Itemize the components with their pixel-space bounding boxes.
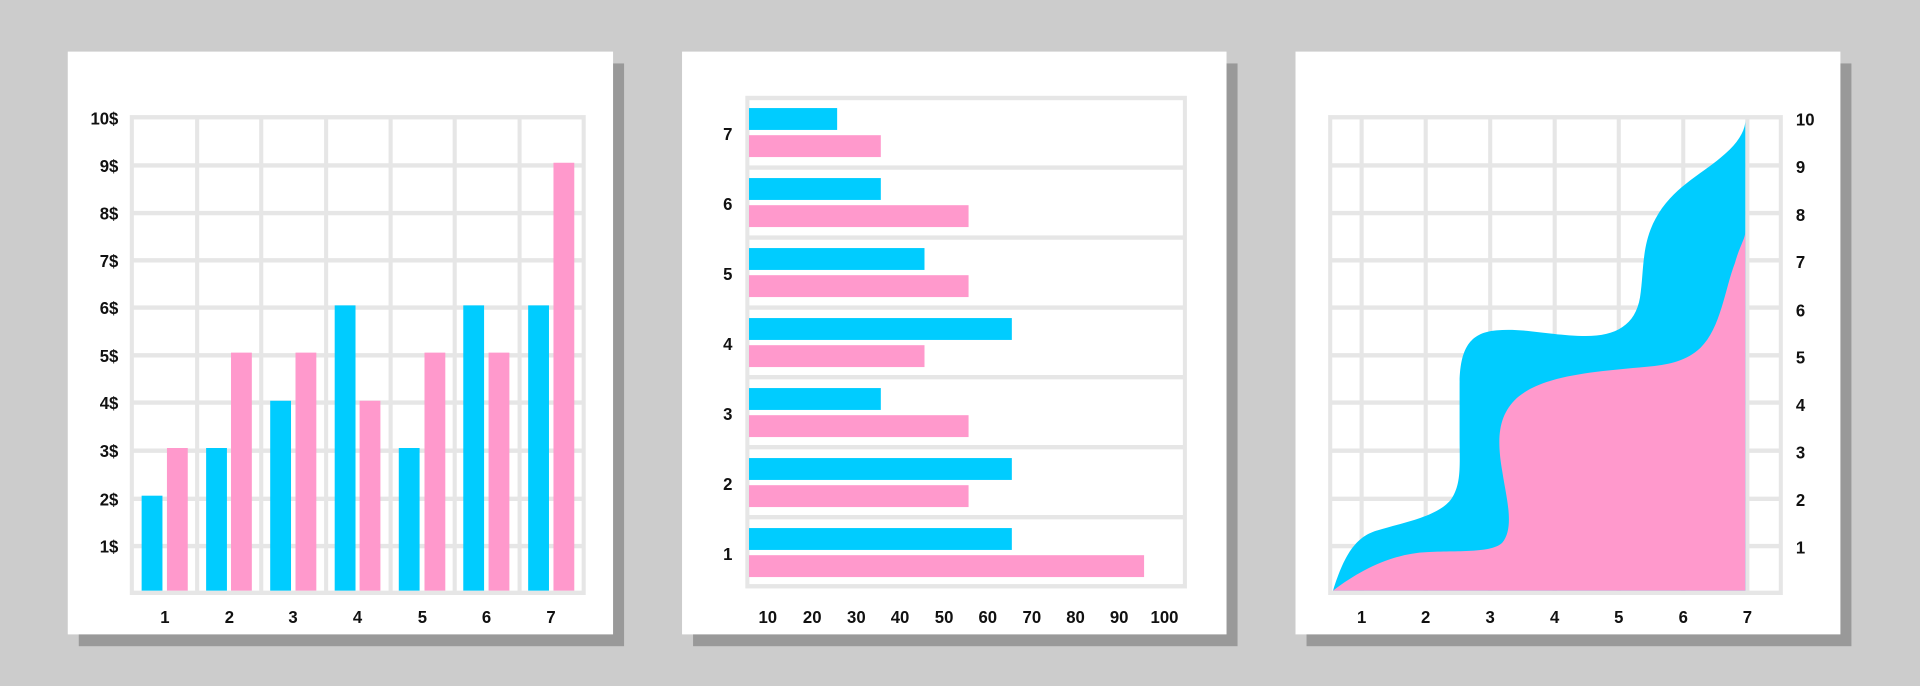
y-axis labels: 4 — [723, 333, 733, 354]
y-axis labels: 4$ — [100, 393, 119, 413]
y-axis labels: 5$ — [100, 345, 119, 366]
y-axis labels (right): 9 — [1796, 156, 1805, 177]
x-axis labels: 70 — [1023, 606, 1041, 627]
x-axis labels — [1357, 606, 1752, 627]
panel: horizontal bar chart — [682, 52, 1238, 646]
x-axis labels: 80 — [1066, 606, 1085, 627]
x-axis labels: 10 — [758, 606, 777, 627]
x-axis labels: 90 — [1110, 606, 1128, 627]
x-axis labels: 30 — [847, 606, 866, 627]
x-axis labels — [160, 606, 556, 627]
y-axis labels (right): 7 — [1796, 252, 1805, 272]
x-axis labels: 6 — [482, 606, 492, 627]
x-axis labels: 50 — [935, 606, 953, 627]
x-axis labels: 4 — [353, 606, 363, 627]
y-axis labels: 1$ — [100, 536, 119, 557]
y-axis labels (right): 4 — [1796, 395, 1806, 415]
x-axis labels: 60 — [978, 606, 997, 627]
x-axis labels: 3 — [1486, 606, 1495, 627]
x-axis labels: 6 — [1679, 606, 1688, 627]
panel: area chart — [1296, 52, 1851, 646]
panel: vertical bar chart — [68, 52, 624, 646]
area: blue series — [1333, 120, 1745, 591]
y-axis labels (right): 3 — [1796, 442, 1806, 463]
y-axis labels — [90, 108, 119, 557]
y-axis labels (right): 10 — [1796, 109, 1815, 130]
y-axis labels: 2 — [723, 473, 732, 494]
x-axis labels: 7 — [546, 606, 556, 627]
x-axis labels: 1 — [160, 606, 170, 627]
x-axis labels: 1 — [1357, 606, 1367, 627]
y-axis labels: 1 — [723, 543, 733, 564]
x-axis labels: 40 — [891, 606, 909, 627]
bars: pink series — [749, 135, 1144, 577]
area: pink series — [1333, 232, 1745, 591]
x-axis labels: 5 — [1614, 606, 1624, 627]
y-axis labels: 6 — [723, 193, 733, 214]
y-axis labels: 7 — [723, 123, 732, 144]
x-axis labels: 3 — [288, 606, 298, 627]
x-axis labels: 5 — [418, 606, 427, 627]
x-axis labels: 2 — [225, 606, 234, 627]
x-axis labels — [758, 606, 1178, 627]
y-axis labels (right): 2 — [1796, 490, 1805, 510]
y-axis labels: 6$ — [100, 298, 119, 318]
y-axis labels: 3 — [723, 403, 733, 424]
x-axis labels: 2 — [1421, 606, 1430, 627]
y-axis labels: 8$ — [100, 203, 119, 224]
x-axis labels: 100 — [1151, 606, 1178, 627]
x-axis labels: 4 — [1550, 606, 1560, 627]
y-axis labels: 3$ — [100, 441, 119, 461]
y-axis labels: 10$ — [90, 108, 119, 129]
bars: blue series — [749, 108, 1012, 550]
x-axis labels: 7 — [1743, 606, 1752, 627]
y-axis labels: 5 — [723, 263, 733, 284]
y-axis labels: 7$ — [100, 250, 119, 271]
bars: pink series — [167, 163, 574, 591]
bars: blue series — [142, 305, 549, 591]
y-axis labels: 9$ — [100, 155, 119, 176]
x-axis labels: 20 — [803, 606, 822, 627]
y-axis labels (right): 1 — [1796, 537, 1806, 558]
y-axis labels — [723, 123, 733, 564]
y-axis labels (right) — [1796, 109, 1815, 558]
y-axis labels (right): 5 — [1796, 347, 1806, 368]
y-axis labels (right): 6 — [1796, 300, 1806, 320]
y-axis labels: 2$ — [100, 489, 119, 509]
y-axis labels (right): 8 — [1796, 204, 1806, 225]
